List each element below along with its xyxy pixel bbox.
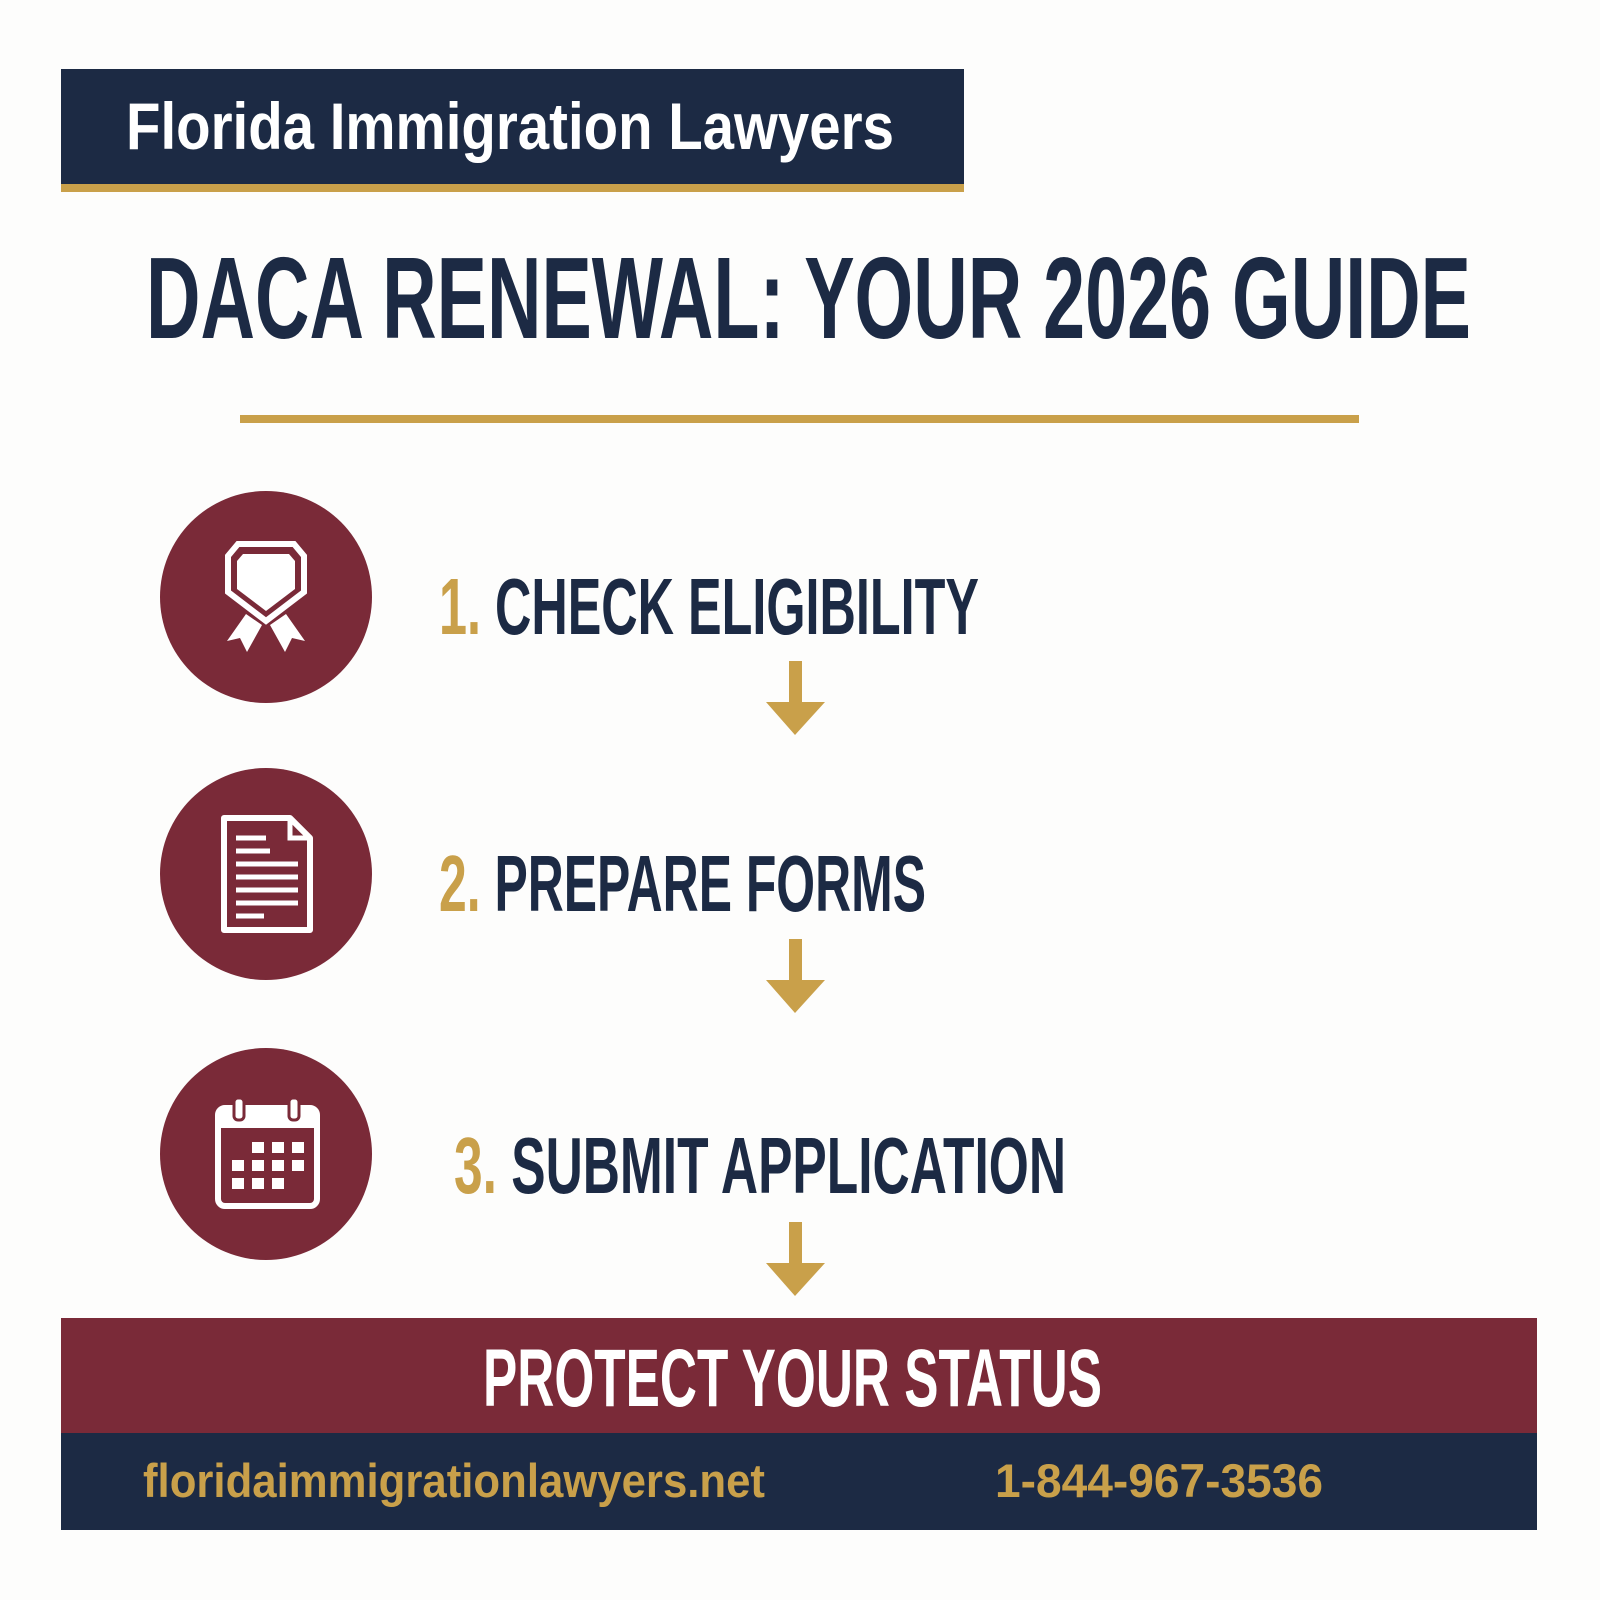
step 3 — [160, 1048, 1066, 1260]
gold divider — [240, 415, 1359, 423]
step 1 label: 1. CHECK ELIGIBILITY — [439, 562, 979, 651]
step 2 — [160, 768, 926, 980]
website: floridaimmigrationlawyers.net — [143, 1454, 765, 1507]
icon: award ribbon — [160, 491, 372, 703]
banner: protect your status — [61, 1318, 1537, 1433]
phone: 1-844-967-3536 — [995, 1454, 1323, 1507]
header banner — [61, 69, 964, 192]
footer contact bar — [61, 1433, 1537, 1530]
header text: Florida Immigration Lawyers — [126, 89, 894, 163]
arrow 3 — [766, 1222, 825, 1296]
arrow 2 — [766, 939, 825, 1013]
step 1 — [160, 491, 979, 703]
step 3 label: 3. SUBMIT APPLICATION — [454, 1121, 1066, 1210]
step 2 label: 2. PREPARE FORMS — [439, 839, 926, 928]
arrow 1 — [766, 661, 825, 735]
icon: document — [160, 768, 372, 980]
banner: protect your status: PROTECT YOUR STATUS — [483, 1333, 1102, 1424]
icon: calendar — [160, 1048, 372, 1260]
